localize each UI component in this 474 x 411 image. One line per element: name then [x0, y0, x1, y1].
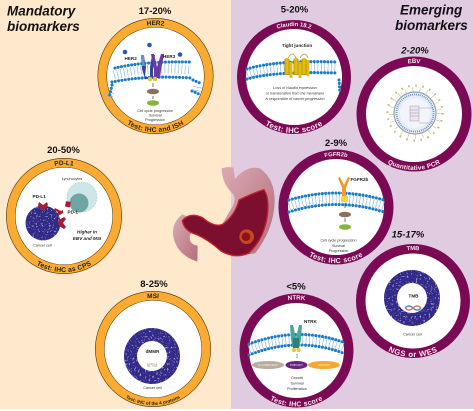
text: FGFR2b outcomes: Progression	[329, 249, 348, 253]
prevalence: Claudin 18.2: 5-20%	[281, 4, 309, 16]
stomach illustration	[173, 167, 275, 262]
prevalence: TMB: 15-17%	[392, 230, 425, 240]
panel: EBV	[356, 46, 472, 172]
ring: NTRK: Test: IHC score	[271, 396, 322, 406]
ring: HER2	[98, 18, 214, 134]
panel: Claudin 18.2	[237, 4, 351, 134]
panel: MSI	[95, 279, 211, 407]
receptors: HER2 and HER3	[123, 43, 182, 81]
text: NTRK outcomes: Survival	[290, 382, 304, 386]
pathway: NTRK ovals: PI3K/AKT	[290, 363, 303, 367]
text: NTRK outcomes: Growth	[291, 376, 303, 380]
ring: EBV: EBV	[408, 58, 420, 64]
panel: PD-L1	[6, 145, 122, 274]
cell: TMB cancer cell	[384, 270, 440, 326]
heading: mandatory biomarkers: biomarkers	[7, 19, 80, 34]
receptor: FGFR2b	[338, 177, 350, 202]
label: cancer cell: Cancer cell	[33, 244, 52, 248]
text: HER2 outcomes: Survival	[148, 114, 162, 118]
icon: EBV virus	[388, 86, 442, 140]
pathway: NTRK ovals: RAS/MEK/ERK	[258, 363, 278, 367]
callout: higher in EBV and MSI: Higher in	[77, 230, 97, 234]
ring: MSI: Test: IHC of the 4 proteins	[126, 395, 180, 405]
ring: TMB	[356, 244, 470, 358]
ring: Claudin 18.2: Test: IHC score	[266, 120, 322, 133]
label: TMB: TMB	[409, 294, 419, 298]
ring: NTRK	[240, 294, 354, 408]
PD-1 marker	[65, 201, 71, 207]
ring: Claudin 18.2	[237, 20, 351, 134]
callout: higher in EBV and MSI: EBV and MSI	[73, 236, 102, 241]
label: HER2: HER2	[124, 56, 137, 61]
label: cancer cell: Cancer cell	[403, 332, 422, 336]
label: cancer cell: Cancer cell	[143, 386, 162, 390]
text: HER2 outcomes: Progression	[145, 118, 165, 122]
text: claudin description: Loss of claudin expression	[273, 86, 317, 90]
membrane: HER2	[108, 62, 202, 99]
text: NTRK outcomes: Proliferation	[287, 387, 307, 391]
panel: mandatory biomarkers background	[0, 0, 231, 409]
icon: mismatch DNA: ld*lld	[147, 363, 158, 369]
heading: mandatory biomarkers: Mandatory	[7, 4, 75, 18]
ring: TMB: TMB	[406, 246, 419, 250]
panel: emerging biomarkers background	[231, 0, 474, 409]
prevalence: HER2: 17-20%	[139, 6, 172, 17]
ring: PD-L1	[6, 158, 122, 274]
lymphocyte	[67, 182, 97, 212]
cell: cancer cell	[26, 206, 60, 240]
label: FGFR2b: FGFR2b	[350, 177, 369, 182]
ring: HER2: Test: IHC and ISH	[128, 120, 184, 132]
protein: claudin	[287, 54, 308, 78]
ring: EBV: Quantitative PCR	[388, 160, 440, 170]
ring: EBV	[356, 56, 472, 172]
text: FGFR2b outcomes: Survival	[332, 244, 345, 248]
prevalence: MSI: 8-25%	[140, 279, 168, 290]
pathway: NTRK ovals	[252, 361, 340, 369]
membrane: Claudin 18.2	[247, 62, 340, 93]
label: dMMR: dMMR	[146, 349, 160, 354]
icon: mutated DNA	[405, 306, 421, 310]
prevalence: NTRK: <5%	[286, 282, 306, 292]
pathway: HER2	[147, 83, 159, 106]
ring: PD-L1: Test: IHC as CPS	[38, 260, 91, 272]
ring: FGFR2b: FGFR2b	[324, 152, 348, 158]
panel: NTRK	[240, 282, 354, 408]
ring: FGFR2b	[278, 150, 394, 264]
ring: HER2: HER2	[146, 20, 164, 26]
membrane: NTRK	[249, 334, 343, 355]
label: lymphocytes: Lynohocytes	[62, 177, 82, 181]
ring: MSI: MSI	[147, 294, 159, 298]
panel: TMB	[356, 230, 470, 358]
text: claudin description: or translocation from the membrane	[266, 92, 324, 96]
ring: Claudin 18.2: Claudin 18.2	[276, 22, 312, 29]
ring: TMB: NGS or WES	[388, 346, 437, 357]
heading: emerging biomarkers: Emerging	[400, 2, 462, 18]
text: HER2 outcomes: Cell cycle progression	[137, 109, 173, 113]
cell: dMMR cancer cell	[124, 328, 180, 384]
text: FGFR2b outcomes: Cell cycle progression	[320, 238, 357, 242]
ring: PD-L1: PD-L1	[54, 160, 74, 166]
label: PD-1: PD-1	[68, 210, 78, 214]
label: tight junction: Tight junction	[282, 43, 312, 48]
text: claudin description: is responsible of cancer progression	[265, 97, 325, 101]
pathway: NTRK ovals: JAK/STAT	[317, 363, 331, 367]
heading: emerging biomarkers: biomarkers	[395, 18, 468, 33]
ring: FGFR2b: Test: IHC score	[310, 252, 362, 264]
prevalence: EBV: 2-20%	[400, 46, 429, 56]
prevalence: PD-L1: 20-50%	[47, 145, 80, 156]
ring: NTRK: NTRK	[288, 295, 306, 300]
PD-L1 receptors	[38, 202, 66, 229]
label: PD-L1: PD-L1	[32, 194, 46, 199]
label: HER3: HER3	[163, 54, 176, 59]
panel: FGFR2b	[278, 138, 394, 264]
panel: HER2	[98, 6, 214, 134]
pathway: FGFR2b	[339, 203, 351, 230]
ring: MSI	[95, 291, 211, 407]
label: NTRK: NTRK	[304, 319, 317, 324]
membrane: FGFR2b	[289, 193, 384, 212]
receptor: NTRK	[290, 325, 302, 358]
prevalence: FGFR2b: 2-9%	[325, 138, 348, 149]
